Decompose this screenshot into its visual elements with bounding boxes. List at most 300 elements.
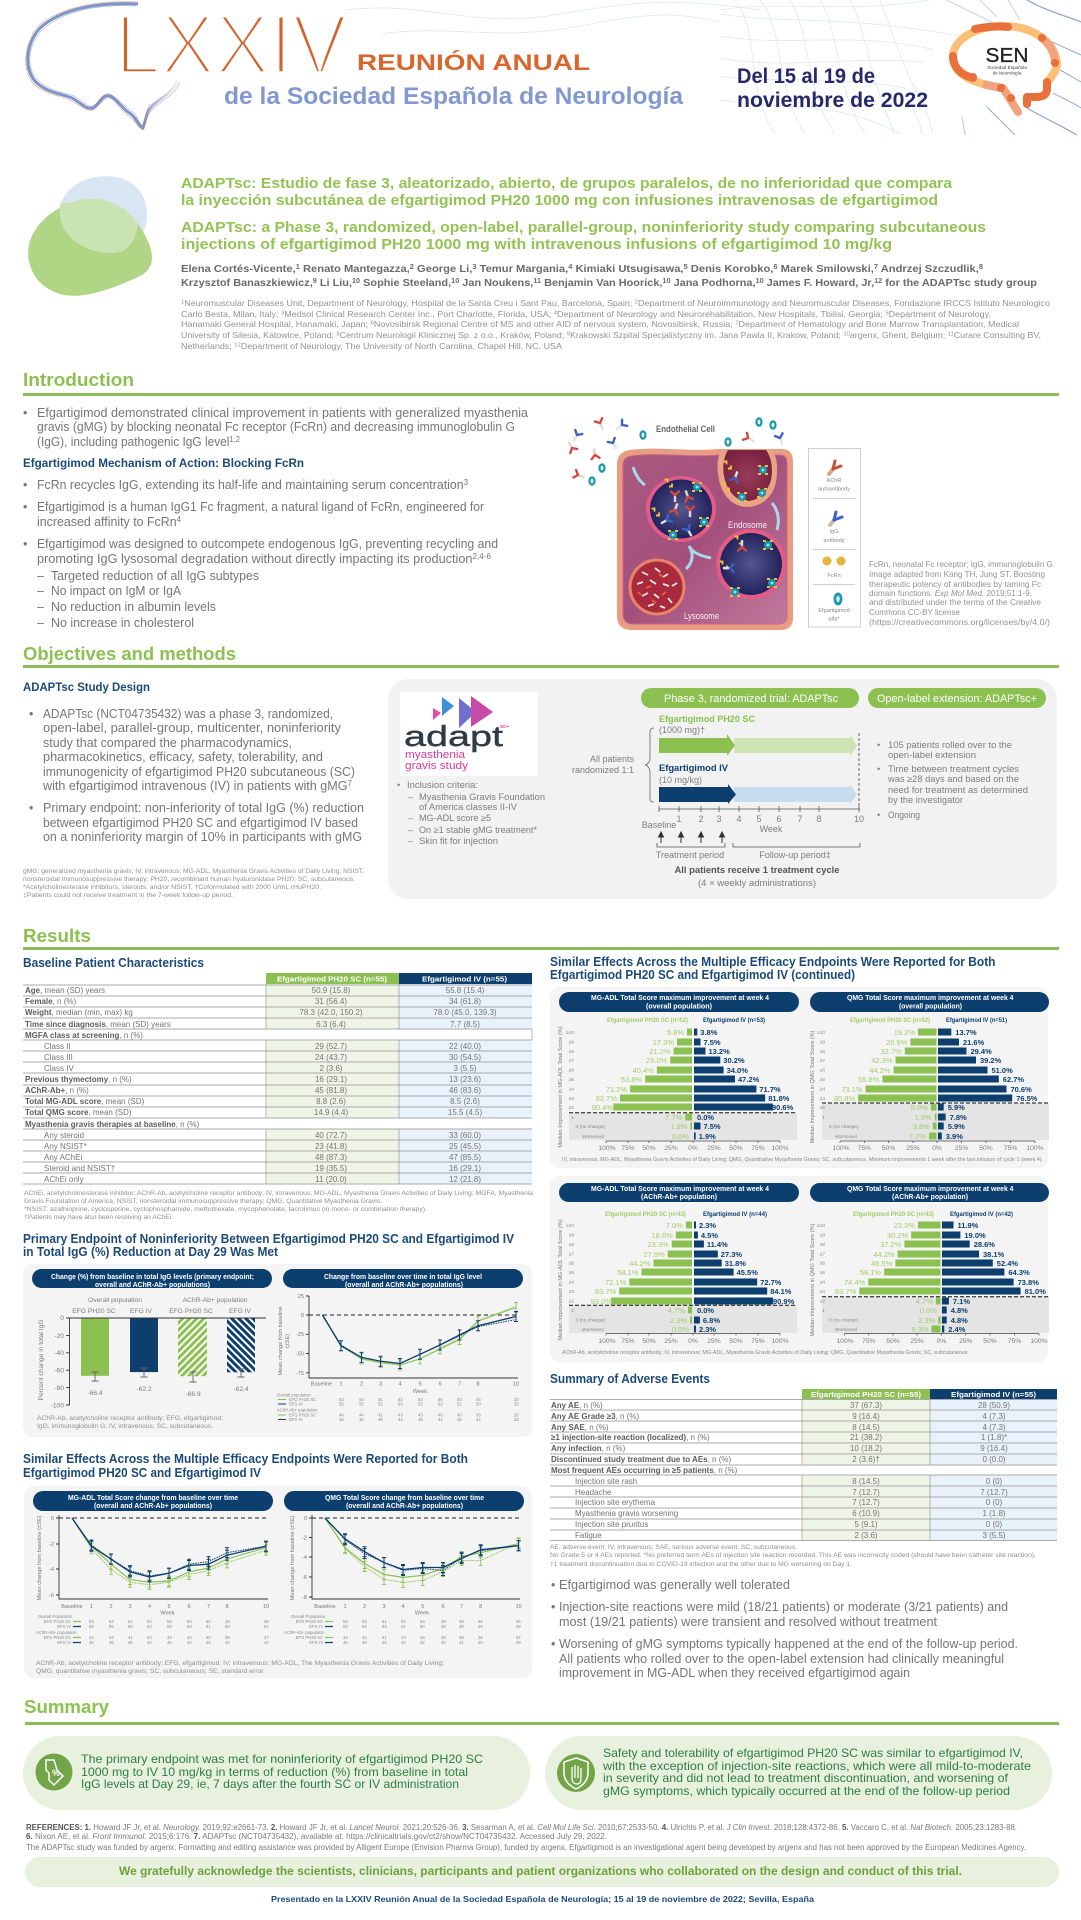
at-risk table: IgG chart: 50: [457, 1397, 462, 1402]
text block: study design bullets: 7: [348, 779, 353, 788]
at-risk table: MG-ADL chart: 44: [89, 1635, 94, 1640]
table: summary of adverse events: 9 (16.4): [852, 1412, 880, 1421]
text block: introduction bullets: –: [37, 600, 44, 614]
treatment and follow-up periods: Follow-up period‡: [759, 850, 831, 860]
bar chart: MG-ADL responders overall: Worsened: [582, 1134, 604, 1140]
table: summary of adverse events: Myasthenia gravis worsening: [575, 1509, 678, 1518]
bar chart: MG-ADL responders AChR-Ab+: Median Improvement in MG-ADL Total Score (%): [558, 1219, 564, 1341]
callout: safety summary: [545, 1736, 1052, 1810]
authors: 10: [756, 278, 764, 285]
table: summary of adverse events: 7 (12.7): [852, 1488, 880, 1497]
bar chart: QMG responders overall: Worsened: [835, 1134, 857, 1140]
bar chart: QMG responders overall: ≥4: [820, 1086, 825, 1092]
bar chart: QMG responders overall: Efgartigimod PH20 SC (n=52): [850, 1018, 930, 1024]
bar chart: QMG responders overall: 62.7%: [1003, 1075, 1024, 1084]
text block: introduction bullets: promoting IgG lysosomal degradation without directly impacting its production: [37, 552, 466, 566]
footnote: study design abbreviations: gMG, generalized myasthenia gravis; IV, intravenous; MG-ADL, Myasthenia Gravis Activities of Daily Living; NSIST,: [23, 868, 364, 875]
bar chart: MG-ADL responders overall: 47.2%: [738, 1075, 760, 1084]
text block: inclusion criteria: On ≥1 stable gMG treatment*: [419, 825, 537, 835]
bar chart: MG-ADL responders AChR-Ab+: 31.8%: [725, 1259, 746, 1268]
bar chart: MG-ADL responders AChR-Ab+: 72.1%: [605, 1278, 627, 1287]
text block: safety bullets: Worsening of gMG symptoms typically happened at the end of the follow-up period.: [559, 1637, 1018, 1651]
bar chart: percent change in total IgG: Overall population: [88, 1297, 142, 1304]
authors: Andrzej Szczudlik,: [878, 263, 979, 275]
authors: 7: [874, 264, 878, 271]
authors: 10: [352, 278, 360, 285]
at-risk table: QMG chart: 49: [459, 1619, 464, 1624]
line chart: MG-ADL change over time: 1: [90, 1604, 93, 1610]
bar chart: MG-ADL responders AChR-Ab+: 50%: [642, 1338, 656, 1345]
at-risk table: QMG chart: 46: [478, 1619, 483, 1624]
bar chart: QMG responders AChR-Ab+: ≥5: [820, 1270, 825, 1276]
bar chart: QMG responders AChR-Ab+: 100%: [836, 1338, 854, 1345]
authors: Li Liu,: [317, 277, 352, 289]
bar chart: QMG responders AChR-Ab+: 100%: [1030, 1338, 1048, 1345]
affiliations: 8: [336, 332, 340, 338]
bar chart: MG-ADL responders AChR-Ab+: 27.9%: [643, 1250, 665, 1259]
bar chart: MG-ADL responders overall: 0 (no change): [576, 1124, 606, 1130]
authors: Denis Korobko,: [688, 263, 773, 275]
authors: 4: [568, 264, 572, 271]
line chart: QMG change over time: 4: [401, 1604, 405, 1610]
table: summary of adverse events: 1 (1.8): [982, 1509, 1006, 1518]
at-risk table: IgG chart: 53: [339, 1397, 344, 1402]
meeting date: Del 15 al 19 de: [737, 65, 875, 88]
footnote: study design abbreviations: *Acetylcholinesterase inhibitors, steroids, and/or NSIST. †Coformulated with 2000 U/mL rHuPH20.: [23, 884, 321, 891]
at-risk table: IgG chart: 44: [339, 1412, 344, 1418]
line chart: IgG change over time: -25: [296, 1332, 304, 1338]
at-risk table: MG-ADL chart: EFG PH20 SC: [44, 1619, 71, 1624]
bar chart: MG-ADL responders AChR-Ab+: 90.9%: [773, 1297, 795, 1306]
bar chart: QMG responders overall: 3.9%: [946, 1132, 963, 1141]
subheading: mechanism of action: Efgartigimod Mechanism of Action: Blocking FcRn: [23, 456, 304, 470]
figure caption: (https://creativecommons.org/licenses/by/4.0/): [869, 617, 1050, 627]
bar chart: QMG responders overall: 25%: [955, 1145, 968, 1152]
at-risk table: IgG chart: 46: [339, 1417, 344, 1422]
authors: 11: [533, 278, 541, 285]
at-risk table: MG-ADL chart: EFG PH20 SC: [44, 1635, 71, 1640]
bar chart: MG-ADL responders overall: 75%: [751, 1145, 765, 1152]
bar chart: percent change in total IgG: -62.4: [233, 1386, 249, 1393]
references and funding: [26, 1823, 1026, 1852]
bar chart: QMG responders overall: 5.9%: [948, 1122, 965, 1131]
text block: extension notes: 105 patients rolled over to the: [888, 740, 1012, 750]
pill: QMG chart title: QMG Total Score change from baseline over time: [325, 1495, 484, 1502]
bar chart: MG-ADL responders overall: 30.2%: [723, 1056, 745, 1065]
pill: QMG AChR title: [810, 1183, 1049, 1202]
at-risk table: MG-ADL chart: 46: [89, 1640, 94, 1645]
text block: study design bullets: on a noninferiority margin of 10% in participants with gMG: [43, 830, 362, 844]
legend box: antibody: [823, 538, 845, 544]
table: baseline patient characteristics: 8.8 (2.6): [316, 1097, 346, 1106]
at-risk table: IgG chart: 54: [359, 1397, 364, 1402]
text block: introduction bullets: •: [23, 478, 27, 492]
callout: primary endpoint summary: 1000 mg to IV 10 mg/kg in terms of reduction (%) from baseline in total: [81, 1765, 468, 1779]
bar chart: QMG responders overall: 3.8%: [913, 1122, 930, 1131]
heading: similar effects continued: Similar Effects Across the Multiple Efficacy Endpoints Were Reported for Both: [550, 954, 996, 969]
at-risk table: QMG chart: 53: [420, 1619, 425, 1624]
table: baseline patient characteristics: Weight, median (min, max) kg: [25, 1008, 133, 1017]
pill: MG-ADL AChR title: [559, 1183, 799, 1202]
bar chart: QMG responders overall: 25%: [906, 1145, 920, 1152]
at-risk table: MG-ADL chart: 46: [109, 1640, 114, 1645]
line chart: QMG change over time: -2: [302, 1536, 307, 1542]
bar chart: MG-ADL responders AChR-Ab+: Efgartigimod IV (n=44): [703, 1212, 767, 1218]
bar chart: MG-ADL responders overall: ≥10: [566, 1030, 574, 1036]
authors: Temur Margania,: [476, 263, 568, 275]
heading: similar effects continued: [550, 954, 996, 982]
heading: Introduction: Introduction: [23, 370, 134, 390]
timeline axis and week labels: 5: [756, 814, 762, 824]
affiliations: 4: [554, 310, 557, 316]
bar chart: MG-ADL responders overall: 5.8%: [667, 1028, 684, 1037]
text block: extension notes: open-label extension: [888, 750, 976, 760]
bar chart: MG-ADL responders AChR-Ab+: 84.1%: [770, 1287, 792, 1296]
bar chart: QMG responders AChR-Ab+: ≥9: [820, 1232, 825, 1238]
bar chart: MG-ADL responders overall: 34.0%: [727, 1066, 748, 1075]
table: baseline patient characteristics: 29 (52.7): [315, 1042, 347, 1051]
table: baseline patient characteristics: 50.9 (15.8): [312, 986, 351, 995]
table: summary of adverse events: 28 (50.9): [978, 1401, 1010, 1410]
table: summary of adverse events: Any infection, n (%): [551, 1444, 626, 1453]
bar chart: QMG responders AChR-Ab+: 2.3%: [918, 1316, 936, 1325]
icon: percent reduction: %: [52, 1768, 60, 1778]
bar chart: QMG responders overall: 70.6%: [1010, 1085, 1032, 1094]
at-risk table: IgG chart: 43: [398, 1412, 403, 1418]
table: baseline patient characteristics: 47 (85.5): [449, 1153, 481, 1162]
bar chart: MG-ADL responders AChR-Ab+: 27.3%: [721, 1250, 742, 1259]
bar chart: QMG responders overall: 19.2%: [894, 1028, 915, 1037]
bar chart: MG-ADL responders AChR-Ab+: 2.3%: [699, 1221, 716, 1230]
at-risk table: QMG chart: 44: [343, 1635, 348, 1640]
bar chart: QMG responders overall: 1.9%: [915, 1113, 932, 1122]
bar chart: QMG responders overall: Median Improvement in QMG Total Score (%): [810, 1030, 816, 1144]
callout: safety summary: gMG symptoms, which typically occurred at the end of the follow-up period: [603, 1784, 1010, 1798]
text block: extension notes: [877, 740, 1028, 820]
line chart: IgG change over time: Week: [413, 1389, 427, 1395]
line chart: QMG change over time: 3: [382, 1604, 386, 1610]
line chart: MG-ADL change over time: 10: [263, 1604, 269, 1610]
at-risk table: QMG chart: 54: [382, 1624, 387, 1629]
bar chart: MG-ADL responders overall: ≥6: [569, 1068, 574, 1074]
at-risk table: MG-ADL chart: 50: [187, 1619, 192, 1624]
at-risk table: IgG chart: 52: [398, 1397, 403, 1402]
randomization label with brace: randomized 1:1: [572, 765, 634, 775]
authors: 12: [874, 278, 882, 285]
bar chart: MG-ADL responders overall: 50%: [729, 1145, 743, 1152]
bar chart: MG-ADL responders overall: ≥9: [569, 1040, 574, 1046]
table: baseline patient characteristics: 48 (87.3): [315, 1153, 347, 1162]
table: summary of adverse events: 6 (10.9): [852, 1509, 880, 1518]
bar chart: MG-ADL responders AChR-Ab+: 72.7%: [760, 1278, 782, 1287]
at-risk table: QMG chart: 39: [441, 1635, 446, 1640]
bar chart: MG-ADL responders AChR-Ab+: 75%: [751, 1338, 765, 1345]
line chart: MG-ADL change over time: 8: [225, 1604, 229, 1610]
table: baseline patient characteristics: Efgartigimod PH20 SC (n=55): [277, 974, 388, 984]
icon: brain outline: [26, 2, 180, 130]
table: summary of adverse events: 0 (0): [986, 1498, 1003, 1507]
bar chart: QMG responders AChR-Ab+: 38.1%: [983, 1250, 1005, 1259]
affiliations: Novosibirsk Regional Centre of MS and other AID of nervous system, Novosibirsk, Russia;: [374, 319, 735, 329]
Spanish title: [181, 175, 953, 209]
at-risk table: IgG chart: 51: [378, 1397, 383, 1402]
bar chart: MG-ADL responders overall: ≥7: [569, 1058, 574, 1064]
authors: 10: [662, 278, 671, 285]
table: summary of adverse events: 0 (0): [986, 1477, 1003, 1486]
timeline axis and week labels: 7: [797, 814, 803, 824]
table: baseline patient characteristics: Steroid and NSIST†: [44, 1164, 115, 1173]
affiliations: Hanamaki General Hospital, Hanamaki, Japan;: [181, 319, 354, 329]
footnote: efficacy over time: QMG, quantitative myasthenia gravis; SC, subcutaneous; SE, standard error.: [36, 1668, 265, 1675]
table: summary of adverse events: 3 (5.5): [982, 1531, 1006, 1540]
bar chart: QMG responders overall: 73.1%: [841, 1085, 863, 1094]
affiliations: 11: [948, 332, 954, 338]
footnote: study design abbreviations: [23, 868, 364, 899]
bar chart: MG-ADL responders AChR-Ab+: 25%: [664, 1338, 678, 1345]
at-risk table: IgG chart: 42: [476, 1417, 481, 1422]
figure caption: [869, 559, 1055, 627]
bar chart: percent change in total IgG: 0: [60, 1315, 64, 1322]
meeting date: [737, 65, 928, 112]
table: baseline patient characteristics: Class III: [44, 1053, 73, 1062]
labels: endosome and lysosome: Lysosome: [684, 611, 719, 622]
at-risk table: IgG chart: 50: [476, 1402, 481, 1406]
timeline axis and week labels: Baseline: [642, 820, 676, 830]
at-risk table: MG-ADL chart: 40: [206, 1635, 211, 1640]
table: baseline patient characteristics: AChEi only: [44, 1175, 84, 1184]
bar chart: MG-ADL responders overall: ≥2: [569, 1105, 574, 1111]
bar chart: percent change in total IgG: Percent change in total IgG: [38, 1319, 45, 1401]
bar chart: QMG responders overall: 76.5%: [1016, 1094, 1038, 1103]
line chart: MG-ADL change over time: 6: [187, 1604, 191, 1610]
bar chart: MG-ADL responders overall: ≥8: [569, 1049, 574, 1055]
affiliations: Centrum Neurologii Klinicznej Sp. z o.o., Kraków, Poland;: [340, 330, 567, 340]
table: baseline patient characteristics: [23, 973, 532, 1184]
at-risk table: IgG chart: 53: [418, 1402, 423, 1406]
at-risk table: QMG chart: 46: [516, 1619, 521, 1624]
legend box: AChR: [827, 478, 841, 484]
heading: similar effects continued: Efgartigimod PH20 SC and Efgartigimod IV (continued): [550, 967, 855, 982]
footnote: adverse events: AE, adverse event; IV, intravenous; SAE, serious adverse event; SC, subcutaneous.: [550, 1544, 797, 1551]
affiliations: University of Silesia, Katowice, Poland;: [181, 330, 324, 340]
at-risk table: QMG chart: EFG PH20 SC: [296, 1635, 323, 1640]
table: summary of adverse events: 4 (7.3): [982, 1423, 1006, 1432]
at-risk table: MG-ADL chart: 51: [206, 1624, 211, 1629]
at-risk table: MG-ADL chart: EFG IV: [57, 1624, 71, 1629]
table: baseline patient characteristics: 33 (60.0): [449, 1131, 481, 1140]
bar chart: QMG responders AChR-Ab+: ≥6: [820, 1260, 825, 1266]
at-risk table: IgG chart: 28: [514, 1417, 519, 1422]
bar chart: percent change in total IgG: -62.2: [136, 1386, 152, 1393]
bar chart: MG-ADL responders overall: Median Improvement in MG-ADL Total Score (%): [558, 1026, 564, 1148]
line chart: QMG change over time: 6: [441, 1604, 445, 1610]
timeline axis and week labels: Week: [760, 824, 783, 834]
at-risk table: MG-ADL chart: 44: [187, 1640, 192, 1645]
at-risk table: QMG chart: EFG PH20 SC: [296, 1619, 323, 1624]
bar chart: QMG responders overall: 1: [822, 1115, 825, 1121]
pill: line chart title: Change from baseline over time in total IgG level: [324, 1274, 482, 1281]
bar chart: QMG responders AChR-Ab+: ≥4: [820, 1280, 825, 1286]
pill: MG-ADL overall title: MG-ADL Total Score maximum improvement at week 4: [591, 995, 769, 1002]
table: baseline patient characteristics: Female, n (%): [25, 997, 76, 1006]
table: summary of adverse events: Injection site erythema: [575, 1498, 656, 1507]
bar chart: MG-ADL responders AChR-Ab+: 2.3%: [670, 1316, 687, 1325]
timeline axis and week labels: 3: [716, 814, 722, 824]
at-risk table: QMG chart: 37: [516, 1635, 521, 1640]
table: baseline patient characteristics: 3 (5.5): [453, 1064, 477, 1073]
footnote: bar chart: IgG, immunoglobulin G; IV, intravenous; SC, subcutaneous.: [37, 1423, 213, 1430]
authors: Kimiaki Utsugisawa,: [572, 263, 684, 275]
logo: adapt myasthenia gravis study: [400, 692, 538, 776]
table: baseline patient characteristics: Total MG-ADL score, mean (SD): [25, 1097, 145, 1106]
bar chart: MG-ADL responders AChR-Ab+: 100%: [771, 1338, 789, 1345]
pill: phase 3 trial: Phase 3, randomized trial: ADAPTsc: [664, 693, 838, 705]
table: baseline patient characteristics: Myasthenia gravis therapies at baseline, n (%): [25, 1120, 200, 1129]
table: summary of adverse events: 9 (16.4): [980, 1444, 1008, 1453]
heading: primary endpoint: [23, 1231, 514, 1259]
table: baseline patient characteristics: 78.0 (45.0, 139.3): [433, 1008, 497, 1017]
bar chart: QMG responders AChR-Ab+: 75%: [1008, 1338, 1021, 1345]
table: summary of adverse events: Headache: [575, 1488, 612, 1497]
bar chart: QMG responders AChR-Ab+: 9.3%: [911, 1325, 929, 1334]
header right blue wave lines: [947, 0, 1081, 135]
authors: Jan Noukens,: [459, 277, 533, 289]
table: summary of adverse events: 0 (0.0): [982, 1455, 1006, 1464]
footnote: overall population charts: IV, intravenous; MG-ADL, Myasthenia Gravis Activities of Daily Living; QMG, Quantitative Myasthenia Gravis; SC, subcutaneous. Minimum improvements 1 week after the last infusion of cycle 1 (week 4).: [562, 1157, 1043, 1163]
at-risk table: QMG chart: 39: [459, 1635, 464, 1640]
bar chart: percent change in total IgG: -66.9: [185, 1391, 201, 1398]
affiliations: Krakowski Szpital Specjalistyczny im. Jana Pawla II, Krakow, Poland;: [570, 330, 843, 340]
table: baseline patient characteristics: 40 (72.7): [315, 1131, 347, 1140]
affiliations: 2: [635, 300, 638, 306]
pill: MG-ADL overall title: [559, 992, 799, 1012]
pill: QMG chart title: [284, 1491, 524, 1511]
text block: introduction bullets: 1,2: [229, 435, 241, 444]
text block: inclusion criteria: Myasthenia Gravis Foundation: [419, 792, 545, 802]
text block: study design bullets: study that compared the pharmacodynamics,: [43, 736, 292, 750]
bar chart: MG-ADL responders overall: ≥3: [569, 1096, 574, 1102]
affiliations: 3: [281, 310, 284, 316]
callout: primary endpoint summary: [23, 1736, 530, 1810]
pill: open-label extension: [868, 688, 1046, 708]
meeting date: noviembre de 2022: [737, 89, 928, 112]
bar chart: QMG responders AChR-Ab+: 2.4%: [948, 1325, 966, 1334]
bar chart: MG-ADL responders overall: 53.8%: [621, 1075, 643, 1084]
at-risk table: QMG chart: 54: [362, 1624, 367, 1629]
table: baseline patient characteristics: 19 (35.5): [315, 1164, 347, 1173]
at-risk table: IgG chart: 36: [476, 1412, 481, 1418]
line chart: MG-ADL change over time: 4: [148, 1604, 151, 1610]
line chart: QMG change over time: [284, 1515, 522, 1645]
bar chart: QMG responders AChR-Ab+: 25%: [910, 1338, 924, 1345]
affiliations: [181, 298, 1050, 351]
authors: 3: [472, 264, 477, 271]
table: baseline patient characteristics: 31 (56.4): [315, 997, 347, 1006]
at-risk table: IgG chart: 35: [514, 1402, 519, 1406]
panel: efficacy over time: [24, 1486, 532, 1678]
bar chart: QMG responders AChR-Ab+: ≥3: [820, 1289, 825, 1295]
line chart: IgG change over time: -75: [296, 1371, 304, 1377]
line chart: IgG change over time: 10: [513, 1382, 519, 1388]
at-risk table: MG-ADL chart: 55: [109, 1624, 114, 1629]
line chart: QMG change over time: 0: [304, 1516, 307, 1522]
authors: 5: [684, 264, 688, 271]
callout: safety summary: with the exception of injection-site reactions, which were all mild-to-moderate: [602, 1759, 1031, 1773]
at-risk table: MG-ADL chart: 45: [167, 1640, 172, 1645]
bar chart: QMG responders overall: 55.8%: [858, 1075, 880, 1084]
heading: primary endpoint: in Total IgG (%) Reduction at Day 29 Was Met: [23, 1244, 279, 1259]
recycling endosome: [716, 529, 786, 599]
legend box: IgG: [829, 529, 839, 535]
at-risk table: MG-ADL chart: 43: [147, 1635, 152, 1640]
pill: bar chart title: overall and AChR-Ab+ populations): [95, 1282, 210, 1289]
text block: study design bullets: open-label, parallel-group, multicenter, noninferiority: [43, 721, 342, 735]
at-risk table: QMG chart: Overall Population: [291, 1614, 326, 1619]
table: baseline patient characteristics: 12 (21.8): [449, 1175, 481, 1184]
bar chart: MG-ADL responders AChR-Ab+: 23.3%: [647, 1240, 669, 1249]
authors: Jana Podhorna,: [671, 277, 756, 289]
table: summary of adverse events: 7 (12.7): [852, 1498, 880, 1507]
at-risk table: QMG chart: [284, 1614, 521, 1645]
at-risk table: QMG chart: 49: [441, 1619, 446, 1624]
at-risk table: MG-ADL chart: 36: [225, 1635, 230, 1640]
pill: open-label extension: Open-label extension: ADAPTsc+: [877, 693, 1037, 705]
bar chart: QMG responders overall: 42.3%: [871, 1056, 893, 1065]
figure caption: Image adapted from Kang TH, Jung ST. Boosting: [869, 569, 1045, 579]
bar chart: QMG responders overall: 75%: [858, 1145, 871, 1152]
bar chart: MG-ADL responders AChR-Ab+: 0%: [688, 1338, 698, 1345]
pill: QMG AChR title: QMG Total Score maximum improvement at week 4: [847, 1186, 1014, 1193]
at-risk table: IgG chart: 55: [359, 1402, 364, 1406]
society name: de la Sociedad Española de Neurología: [224, 83, 684, 110]
icon: SEN society logo: Sociedad Española: [987, 65, 1027, 70]
line chart: IgG change over time: 25: [298, 1294, 304, 1300]
bar chart: QMG responders AChR-Ab+: 25%: [959, 1338, 973, 1345]
bar chart: QMG responders overall: [810, 1018, 1049, 1152]
text block: inclusion criteria: –: [408, 813, 413, 823]
randomization label with brace: [572, 728, 654, 802]
text block: study design bullets: Primary endpoint: non-inferiority of total IgG (%) reduction: [43, 801, 364, 815]
table: summary of adverse events: Efgartigimod PH20 SC (n=55): [811, 1390, 922, 1399]
text block: safety bullets: improvement in MG-ADL when they received efgartigimod again: [559, 1666, 910, 1680]
line chart: IgG change over time: 6: [438, 1382, 442, 1388]
bar chart: MG-ADL responders AChR-Ab+: 1: [571, 1308, 574, 1314]
table: baseline patient characteristics: 11 (20.0): [315, 1175, 347, 1184]
bar chart: MG-ADL responders overall: 0.0%: [697, 1113, 714, 1122]
table: baseline patient characteristics: 13 (23.6): [449, 1075, 481, 1084]
bar chart: MG-ADL responders overall: 25%: [664, 1145, 678, 1152]
at-risk table: MG-ADL chart: 46: [128, 1640, 133, 1645]
line chart: MG-ADL change over time: 0: [51, 1516, 54, 1522]
icon: IgG antibody: [830, 512, 842, 525]
authors: 8: [979, 264, 983, 271]
bar chart: QMG responders AChR-Ab+: Efgartigimod PH20 SC (n=43): [853, 1212, 934, 1218]
bar chart: percent change in total IgG: AChR-Ab+ population: [183, 1297, 248, 1304]
table: baseline patient characteristics: 55.8 (15.4): [446, 986, 485, 995]
trafficking arrows: [633, 467, 778, 569]
bar chart: QMG responders AChR-Ab+: Efgartigimod IV (n=42): [950, 1212, 1013, 1218]
pill: MG-ADL AChR title: MG-ADL Total Score maximum improvement at week 4: [591, 1186, 769, 1193]
at-risk table: QMG chart: 42: [401, 1640, 406, 1645]
affiliations: Medsol Clinical Research Center Inc., Port Charlotte, Florida, USA;: [284, 309, 554, 319]
English title: injections of efgartigimod PH20 1000 mg with intravenous infusions of efgartigimod 10 mg/kg: [181, 236, 892, 253]
affiliations: Netherlands;: [181, 341, 228, 351]
at-risk table: MG-ADL chart: 42: [264, 1640, 269, 1645]
at-risk table: IgG chart: 45: [418, 1417, 423, 1422]
pill: QMG overall title: [810, 992, 1049, 1012]
timeline axis and week labels: 4: [736, 814, 742, 824]
text block: introduction bullets: increased affinity to FcRn: [37, 515, 178, 529]
